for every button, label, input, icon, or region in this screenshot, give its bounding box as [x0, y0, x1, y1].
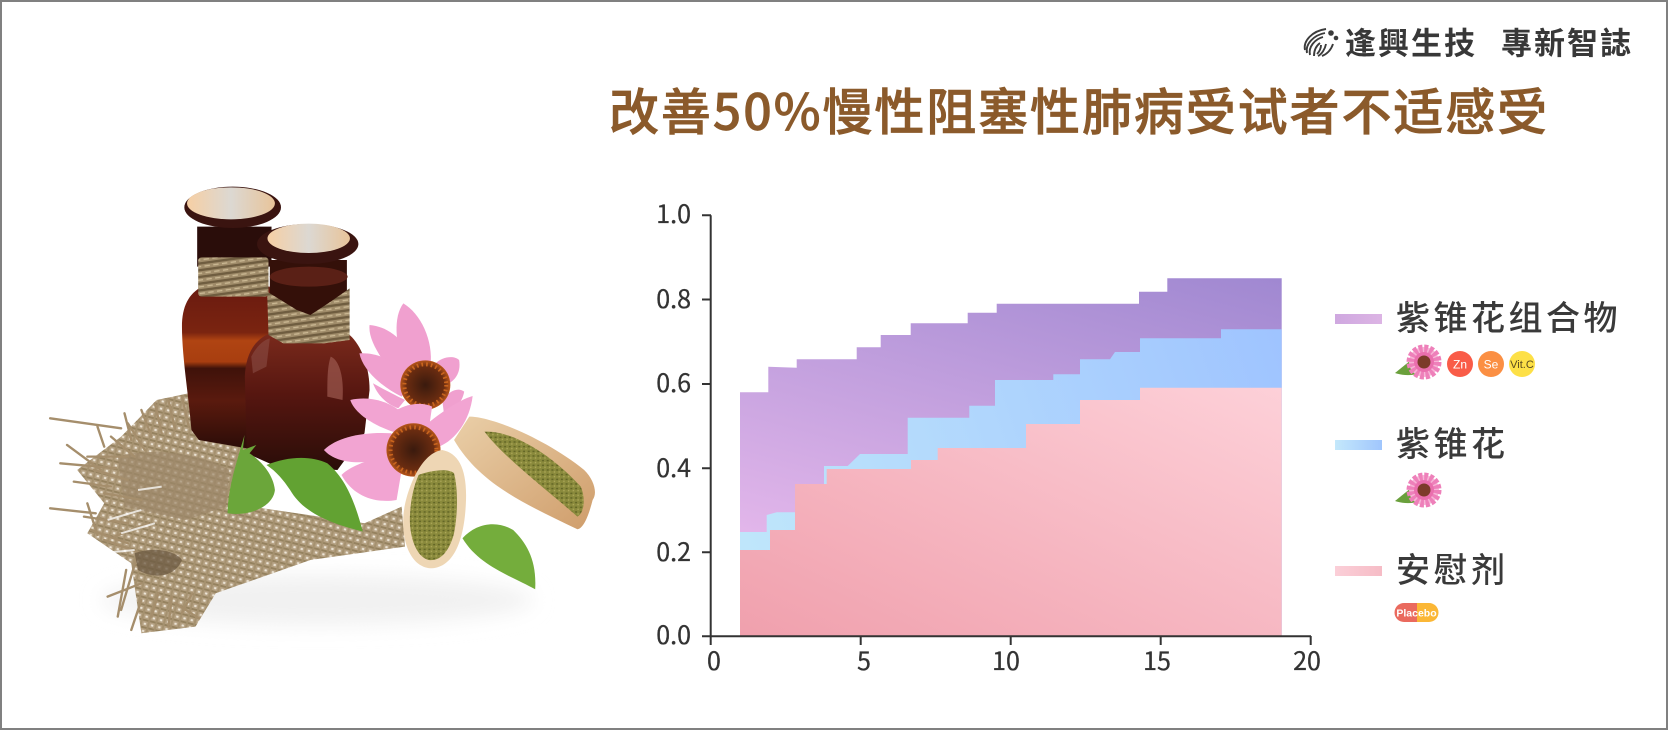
- area: 安慰剂: [740, 388, 1282, 636]
- burlap cloth: [50, 393, 405, 633]
- back bottle: [182, 187, 281, 450]
- wooden scoop right: [454, 417, 595, 529]
- x axis labels: 20: [1293, 642, 1321, 678]
- y axis labels: 1.0: [656, 195, 691, 231]
- x axis labels: [707, 642, 1321, 678]
- ground shadow: [101, 575, 533, 625]
- y axis labels: 0.6: [656, 364, 691, 400]
- x axis labels: 15: [1143, 642, 1171, 678]
- icon: brand logo: [1305, 29, 1338, 56]
- y axis labels: 0.2: [656, 533, 691, 569]
- leaves: [228, 435, 535, 589]
- icon: echinacea flower: [1395, 475, 1439, 505]
- y axis labels: 0.8: [656, 280, 691, 316]
- brand header: [1305, 18, 1633, 64]
- photo: echinacea bottles, burlap, herbs: [50, 187, 595, 633]
- icon: Placebo pill: [1394, 603, 1438, 622]
- legend: 紫锥花组合物: 紫锥花组合物: [1396, 291, 1621, 340]
- legend: 紫锥花组合物: [1335, 291, 1621, 377]
- front bottle: [245, 224, 370, 470]
- x axis labels: 10: [992, 642, 1020, 678]
- x axis labels: 0: [707, 642, 721, 678]
- icon: Vit.C: [1509, 351, 1535, 377]
- wooden scoop front: [403, 450, 466, 568]
- icon: Zn: [1447, 351, 1473, 377]
- icon: Se: [1478, 351, 1504, 377]
- stacked area chart: [656, 195, 1321, 678]
- x axis labels: 5: [857, 642, 871, 678]
- y axis labels: [656, 195, 691, 652]
- y axis: [702, 215, 1311, 645]
- journal name: 專新智誌: [1501, 18, 1633, 64]
- icon: Vit.C: Vit.C: [1510, 359, 1534, 371]
- title: 改善50%慢性阻塞性肺病受试者不适感受: [609, 73, 1549, 145]
- area: 紫锥花: [740, 329, 1282, 636]
- legend: 安慰剂: [1335, 543, 1508, 622]
- lower flower: [324, 396, 473, 501]
- legend: 紫锥花: [1335, 417, 1508, 505]
- icon: Se: Se: [1484, 358, 1499, 372]
- icon: echinacea flower: [1395, 347, 1439, 377]
- upper flower: [359, 303, 464, 413]
- icon: Placebo pill: Placebo: [1396, 608, 1437, 620]
- legend: 安慰剂: 安慰剂: [1396, 543, 1508, 592]
- legend: [1335, 291, 1621, 622]
- y axis labels: 0.4: [656, 449, 691, 485]
- icon: Zn: Zn: [1453, 358, 1467, 372]
- area: 紫锥花组合物: [740, 278, 1282, 636]
- company name: 逢興生技: [1345, 18, 1477, 64]
- y axis labels: 0.0: [656, 616, 691, 652]
- legend: 紫锥花: 紫锥花: [1396, 417, 1508, 466]
